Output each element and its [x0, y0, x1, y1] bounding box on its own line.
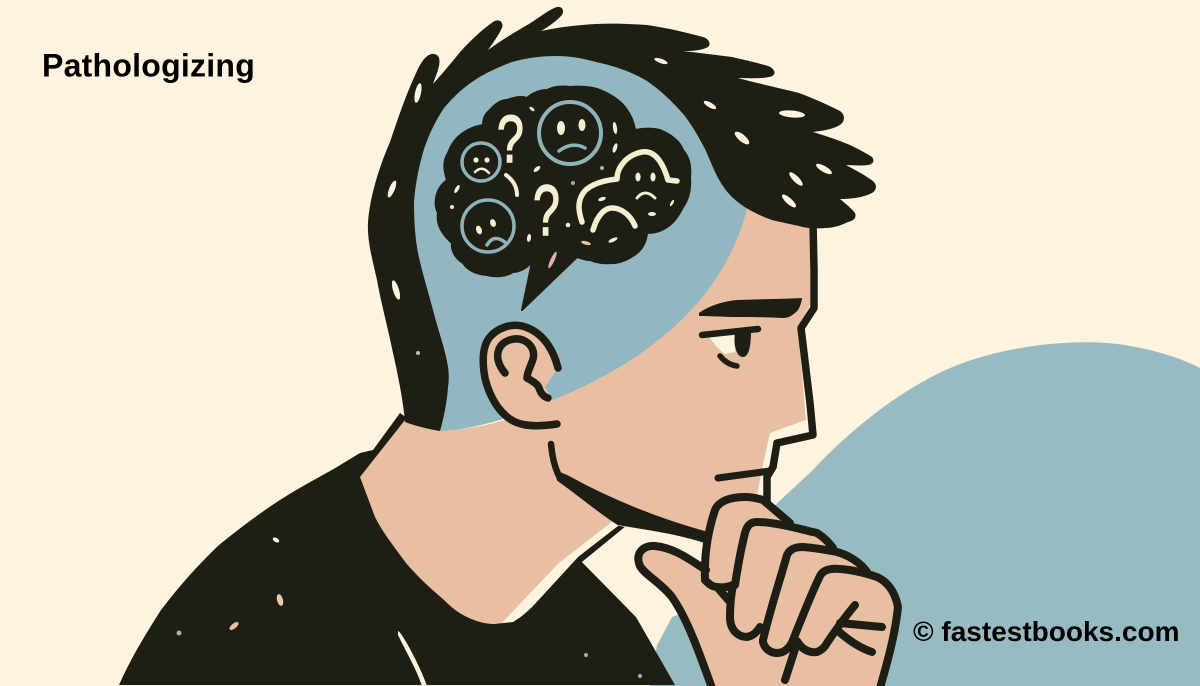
jaw line: [551, 444, 708, 543]
shirt: [119, 413, 720, 686]
brain flecks: [450, 106, 675, 269]
brain thought bubble: [436, 86, 690, 310]
mouth: [718, 471, 770, 478]
blue head area: [405, 45, 755, 432]
figure: thinking man: [119, 7, 898, 686]
sad face tilted: [462, 200, 514, 252]
cloud face eyes: [635, 172, 656, 182]
cream stripe at neck: [502, 521, 618, 623]
sad face small: [462, 143, 500, 181]
face profile line: [767, 222, 814, 502]
sad cloud faces: [579, 152, 677, 230]
shirt flecks: [176, 537, 642, 686]
cream chin gap: [762, 420, 813, 480]
hand: [638, 495, 898, 686]
question marks: ?: [497, 102, 524, 177]
hair highlights: [386, 57, 833, 355]
eye: [702, 329, 758, 366]
hair: [368, 7, 876, 431]
face and neck skin: [360, 205, 810, 624]
sad face large: [539, 102, 601, 164]
title: Pathologizing: [42, 48, 255, 84]
question marks: [497, 102, 560, 250]
question marks: ?: [533, 171, 560, 250]
blue background shape: [650, 342, 1200, 686]
copyright: © fastestbooks.com: [913, 616, 1179, 647]
collar: [582, 526, 720, 645]
ear: [483, 325, 558, 426]
eyebrow: [699, 298, 802, 318]
